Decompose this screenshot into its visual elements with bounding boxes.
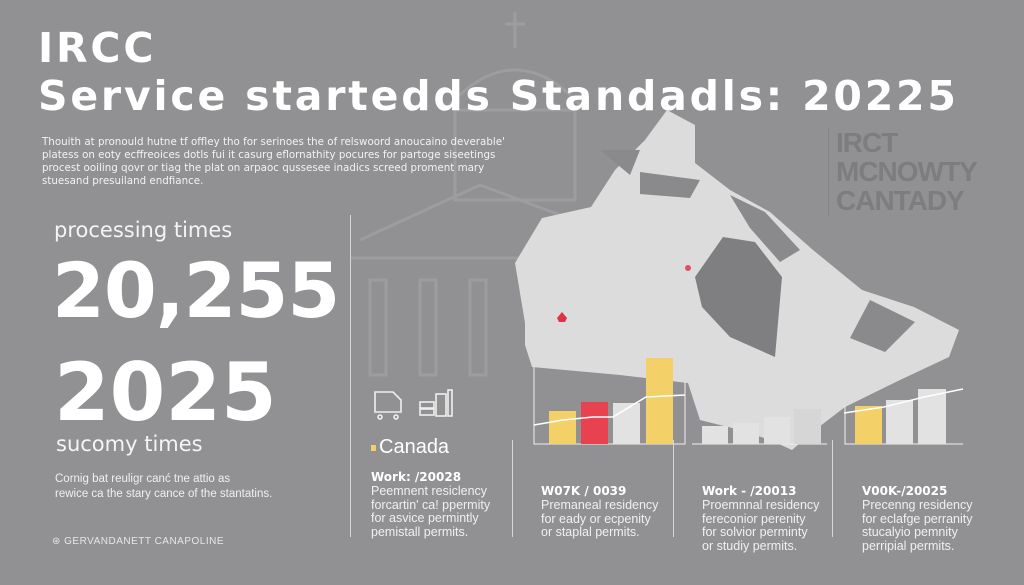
column 3: fereconior perenity — [702, 512, 806, 526]
column 2 — [541, 484, 658, 539]
column 2: or staplal permits. — [541, 525, 640, 539]
intro text — [42, 136, 505, 187]
bar chart 1 — [534, 358, 686, 444]
column 4: for eclafge perranity — [862, 512, 972, 526]
column 2: Premaneal residency — [541, 498, 658, 512]
title: Service startedds Standadls: 20225 — [38, 72, 959, 120]
column 2: for eady or ecpenity — [541, 512, 651, 526]
footer logo: ⊛ GERVANDANETT CANAPOLINE — [52, 536, 224, 547]
column 1: pemistall permits. — [371, 524, 468, 538]
title — [38, 24, 959, 120]
icons row — [374, 389, 453, 420]
column 1: forcartin' ca! ppermity — [371, 498, 490, 512]
column 1: for asvice permintly — [371, 511, 479, 525]
big number 2025: 2025 — [54, 346, 277, 439]
column 3 — [702, 484, 820, 552]
column 1: Work: /20028 — [371, 470, 461, 484]
intro text: platess on eoty ecffreoices dotls fui it casurg eflornathity pocures for partoge siseetings — [42, 149, 495, 161]
intro text: stuesand presuiland endfiance. — [42, 175, 203, 187]
watermark text: MCNOWTY — [836, 156, 977, 187]
column 3: Work - /20013 — [702, 484, 796, 498]
column 3: for solvior perminty — [702, 525, 808, 539]
title: IRCC — [38, 24, 156, 72]
sucomy times label: sucomy times — [56, 432, 203, 456]
column 3: Proemnnal residency — [702, 498, 819, 512]
column 4: Precenng residency — [862, 498, 972, 512]
left description — [55, 473, 272, 500]
big number 20,255: 20,255 — [52, 246, 339, 335]
column 1 — [371, 470, 490, 538]
watermark text — [836, 127, 978, 216]
column 4: perripial permits. — [862, 538, 954, 552]
processing times label: processing times — [54, 218, 232, 242]
column 4: stucalyio pemnity — [862, 525, 958, 539]
column 4 — [862, 484, 972, 552]
legend Canada: Canada — [379, 436, 449, 458]
watermark text: CANTADY — [836, 185, 964, 216]
column 2: W07K / 0039 — [541, 484, 626, 498]
intro text: procest ooiling qovr or tiag the plat on arpaoc qussesee inadics screed proment mary — [42, 162, 484, 174]
left description: Cornig bat reuligr canć tne attio as — [55, 473, 230, 485]
bar chart 3 — [844, 388, 964, 444]
column 1: Peemnent resiclency — [371, 484, 487, 498]
column 4: V00K-/20025 — [862, 484, 947, 498]
watermark text: IRCT — [836, 127, 897, 158]
left description: rewice ca the stary cance of the stantatins. — [55, 488, 272, 500]
bar chart 2 — [692, 426, 827, 444]
column 3: or studiy permits. — [702, 538, 797, 552]
intro text: Thouith at pronould hutne tf offley tho for serinoes the of relswoord anoucaino deverable' — [42, 136, 505, 148]
